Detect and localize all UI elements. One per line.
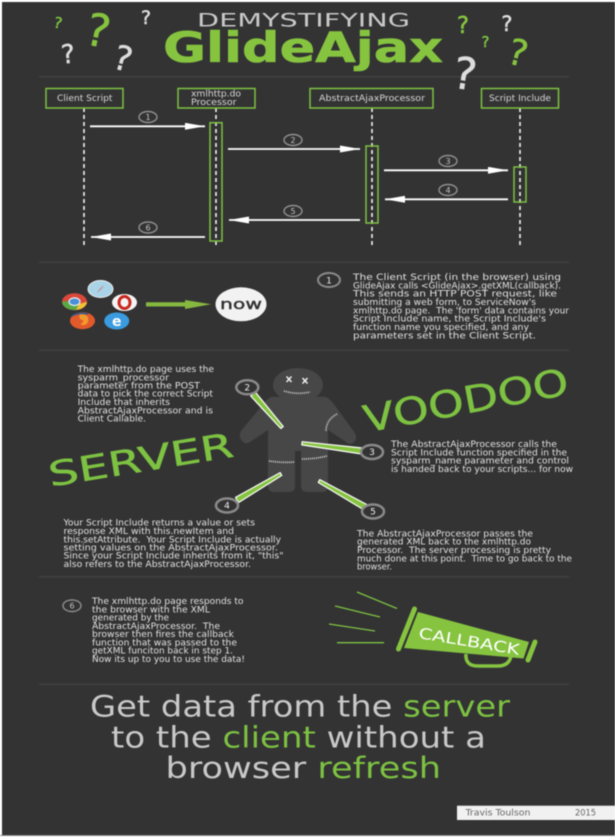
question marks decoration: ? (81, 2, 115, 59)
text block: step 1: The Client Script (in the browser) using (352, 273, 561, 283)
text block: step 1: parameters set in the Client Script. (353, 331, 536, 341)
question marks decoration: ? (501, 12, 513, 36)
text block: step 3: sysparm_name parameter and control (391, 457, 569, 467)
footer credit (457, 806, 615, 820)
megaphone body (404, 612, 529, 658)
question marks decoration: ? (450, 48, 480, 102)
text block: step 5: Processor. The server processing is pretty (357, 546, 552, 556)
text block: step 5: browser. (357, 563, 392, 573)
text block: step 4: also refers to the AbstractAjaxProcessor. (64, 560, 251, 570)
sequence diagram: 6 (145, 224, 151, 232)
text block: step 6: getXML funciton back in step 1. (92, 647, 233, 657)
closing statement: Get data from the server (90, 690, 510, 724)
title line: Demystifying: DEMYSTIFYING (197, 10, 410, 32)
closing statement (90, 690, 510, 785)
icon: ServiceNow logo: now (220, 297, 262, 313)
question marks decoration: ? (60, 39, 77, 71)
text block: step 6: the browser with the XML (92, 605, 210, 615)
text block: step 5: generated XML back to the xmlhttp.do (357, 538, 531, 548)
footer credit: Travis Toulson (464, 808, 530, 818)
box: Client Script: Client Script (57, 94, 113, 104)
text block: step 1: function name you specified, and any (353, 323, 530, 333)
question marks decoration: ? (504, 32, 532, 76)
icon: internet explorer: e (112, 314, 121, 330)
pin 2: 2 (244, 384, 250, 394)
text block: step 2: AbstractAjaxProcessor and is (78, 406, 213, 416)
question marks decoration: ? (52, 13, 64, 33)
badge: step 6: 6 (69, 602, 75, 610)
label: CALLBACK: CALLBACK (417, 624, 522, 659)
text block: step 4: this.setAttribute. Your Script Include is actually (64, 535, 282, 545)
text block: step 6: function that was passed to the (92, 638, 237, 648)
text block: step 3: is handed back to your scripts... for now (391, 465, 573, 475)
badge: step 1: 1 (326, 276, 332, 286)
text block: step 6 (91, 597, 245, 665)
pin 5 (318, 480, 384, 518)
text block: step 1: Script Include name, the Script Include's (353, 315, 546, 325)
text block: step 6: The xmlhttp.do page responds to (91, 597, 244, 607)
text block: step 2: The xmlhttp.do page uses the (77, 365, 214, 375)
heading: SERVER: SERVER (45, 426, 236, 495)
text block: step 2: Include that inherits (78, 398, 170, 408)
sequence diagram: 3 (445, 157, 451, 166)
sound lines (329, 592, 397, 643)
megaphone handle (466, 654, 511, 666)
sequence diagram (46, 88, 558, 246)
footer credit: 2015 (575, 808, 596, 818)
text block: step 6: generated by the (92, 614, 169, 624)
sequence diagram: 4 (445, 186, 451, 195)
arrow: browser to ServiceNow (146, 300, 211, 309)
text block: step 5: much done at this point. Time to go back to the (357, 554, 572, 564)
box: Script Include: Script Include (489, 94, 551, 104)
sequence diagram: 5 (290, 207, 296, 216)
text block: step 2: data to pick the correct Script (78, 390, 213, 400)
doll stitches (269, 391, 337, 462)
text block: step 4: Your Script Include returns a value or sets (62, 519, 255, 529)
pin 3 (302, 442, 383, 459)
text block: step 2: parameter from the POST (78, 382, 201, 392)
pin 3: 3 (369, 448, 375, 458)
browser icons (62, 280, 137, 330)
question marks decoration: ? (457, 13, 469, 39)
sequence diagram: 1 (145, 113, 151, 122)
lifelines (84, 108, 520, 246)
megaphone back bar (528, 642, 535, 660)
box: AbstractAjaxProcessor (310, 88, 433, 108)
title line: GlideAjax: GlideAjax (163, 23, 443, 72)
icon: opera (112, 294, 137, 311)
icon: safari (88, 280, 113, 298)
megaphone front bar (398, 609, 414, 649)
pin 4 (216, 473, 282, 512)
text block: step 6: browser then fires the callback (92, 630, 235, 640)
icon: ServiceNow logo (216, 287, 266, 321)
text block: step 1: xmlhttp.do page. The 'form' data contains your (353, 306, 569, 316)
doll body (240, 397, 356, 492)
box: Client Script (46, 88, 123, 108)
question marks decoration: ? (141, 7, 151, 29)
text block: step 1: GlideAjax calls <GlideAjax>.getXML(callback). (353, 281, 561, 291)
icon: firefox (70, 312, 95, 329)
text block: step 4: response XML with this.newItem and (64, 527, 234, 537)
title (163, 10, 443, 72)
question marks decoration: ? (109, 38, 137, 81)
text block: step 3: Script Include function specified in the (391, 448, 567, 458)
box: xmlhttp.do Processor (178, 88, 255, 108)
box: Script Include (482, 88, 558, 108)
text block: step 2: Client Callable. (78, 415, 146, 425)
question marks decoration (52, 2, 532, 102)
closing statement: to the client without a (111, 721, 486, 755)
text block: step 1: submitting a web form, to ServiceNow's (353, 298, 536, 308)
box: xmlhttp.do Processor: xmlhttp.do (191, 90, 241, 100)
text block: step 5 (356, 529, 572, 573)
arrows (90, 126, 508, 237)
text block: step 6: AbstractAjaxProcessor. The (92, 622, 220, 632)
text block: step 1 (352, 273, 569, 341)
icon: chrome (62, 293, 87, 310)
badge: step 6 (63, 600, 81, 612)
question marks decoration: ? (482, 33, 489, 51)
text block: step 4: Since your Script Include inherits from it, "this" (64, 552, 284, 562)
pin 5: 5 (370, 508, 376, 518)
text block: step 3: The AbstractAjaxProcessor calls the (390, 440, 557, 450)
text block: step 5: The AbstractAjaxProcessor passes the (356, 529, 533, 539)
text block: step 4: setting values on the AbstractAjaxProcessor. (64, 544, 278, 554)
icon: callback megaphone (329, 592, 535, 666)
pin 2 (236, 380, 283, 428)
sequence diagram: 2 (290, 136, 296, 145)
text block: step 1: This sends an HTTP POST request, like (352, 290, 558, 300)
step number badges (139, 112, 457, 233)
closing statement: browser refresh (166, 751, 441, 785)
heading: VOODOO: VOODOO (360, 360, 572, 441)
text block: step 4 (62, 519, 284, 570)
doll eyes (286, 376, 308, 384)
voodoo doll (216, 368, 384, 518)
text block: step 3 (390, 440, 573, 475)
badge: step 1 (318, 273, 340, 287)
text block: step 2: sysparm_processor (78, 373, 169, 383)
text block: step 2 (77, 365, 214, 425)
box: xmlhttp.do Processor: Processor (191, 98, 237, 108)
activation bars (210, 123, 526, 241)
pin 4: 4 (224, 502, 230, 512)
doll head (273, 368, 323, 402)
text block: step 6: Now its up to you to use the data! (92, 655, 245, 665)
box: AbstractAjaxProcessor: AbstractAjaxProcessor (319, 94, 425, 104)
